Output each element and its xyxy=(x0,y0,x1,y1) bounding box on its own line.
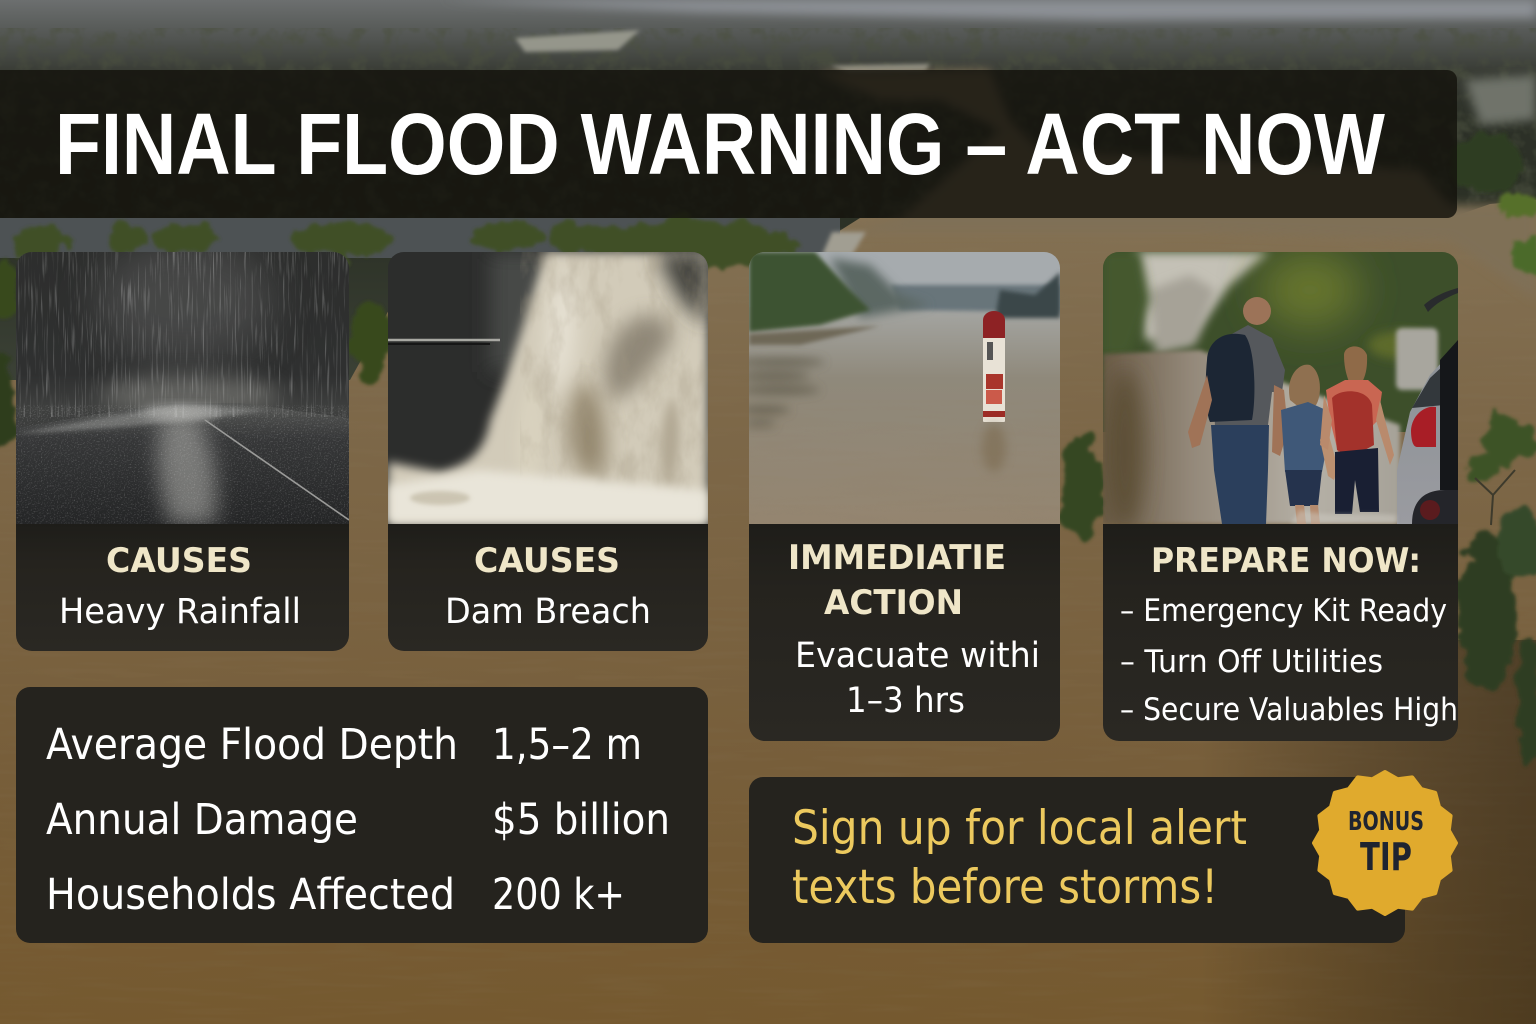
caption: immediate action: ACTION xyxy=(824,583,963,623)
tip text xyxy=(792,801,1247,915)
stat: average flood depth: 1,5–2 m xyxy=(492,720,642,770)
panel: bonus tip xyxy=(749,777,1405,943)
icon: warning post xyxy=(983,311,1005,422)
stat: average flood depth: Average Flood Depth xyxy=(46,720,458,770)
stat: annual damage xyxy=(46,795,670,845)
panel: causes dam breach xyxy=(388,252,708,651)
panel: immediate action xyxy=(735,252,1060,741)
stat: annual damage: $5 billion xyxy=(492,795,670,845)
caption: immediate action xyxy=(788,538,1040,721)
caption: causes dam breach: Dam Breach xyxy=(445,592,651,632)
caption: causes heavy rainfall: CAUSES xyxy=(106,541,252,581)
photo: heavy rain on road xyxy=(16,240,349,524)
tip text: texts before storms! xyxy=(792,860,1218,915)
badge: bonus tip: BONUS xyxy=(1348,807,1424,837)
panel: flood statistics xyxy=(16,687,708,943)
caption: prepare now list: PREPARE NOW: xyxy=(1151,541,1421,581)
car xyxy=(1396,288,1458,524)
caption: immediate action: Evacuate withi xyxy=(795,636,1040,676)
photo: dam breach xyxy=(388,252,708,524)
caption: immediate action: 1–3 hrs xyxy=(846,681,965,721)
stat: households affected: 200 k+ xyxy=(492,870,625,920)
caption: prepare now list: – Secure Valuables High xyxy=(1120,692,1458,728)
photo: flooded river with marker post xyxy=(735,252,1060,524)
badge: bonus tip: TIP xyxy=(1360,835,1412,879)
figure: mother xyxy=(1320,346,1394,514)
panel: causes heavy rainfall xyxy=(16,240,349,651)
tip text: Sign up for local alert xyxy=(792,801,1247,856)
stat: annual damage: Annual Damage xyxy=(46,795,358,845)
title banner xyxy=(0,70,1457,218)
badge: bonus tip xyxy=(1314,772,1456,914)
stat: households affected: Households Affected xyxy=(46,870,455,920)
caption: causes dam breach: CAUSES xyxy=(474,541,620,581)
figure: girl xyxy=(1281,365,1338,524)
caption: prepare now list: – Turn Off Utilities xyxy=(1120,644,1383,680)
caption: prepare now list: – Emergency Kit Ready xyxy=(1120,593,1447,629)
caption: causes heavy rainfall xyxy=(59,541,301,632)
caption: causes heavy rainfall: Heavy Rainfall xyxy=(59,592,301,632)
photo: family wading through flood xyxy=(1103,252,1458,530)
panel: prepare now xyxy=(1103,252,1458,741)
figure: father xyxy=(1188,297,1288,524)
caption: prepare now list xyxy=(1120,541,1458,728)
caption: causes dam breach xyxy=(445,541,651,632)
caption: immediate action: IMMEDIATIE xyxy=(788,538,1006,578)
river seen through the banner xyxy=(815,70,1536,300)
